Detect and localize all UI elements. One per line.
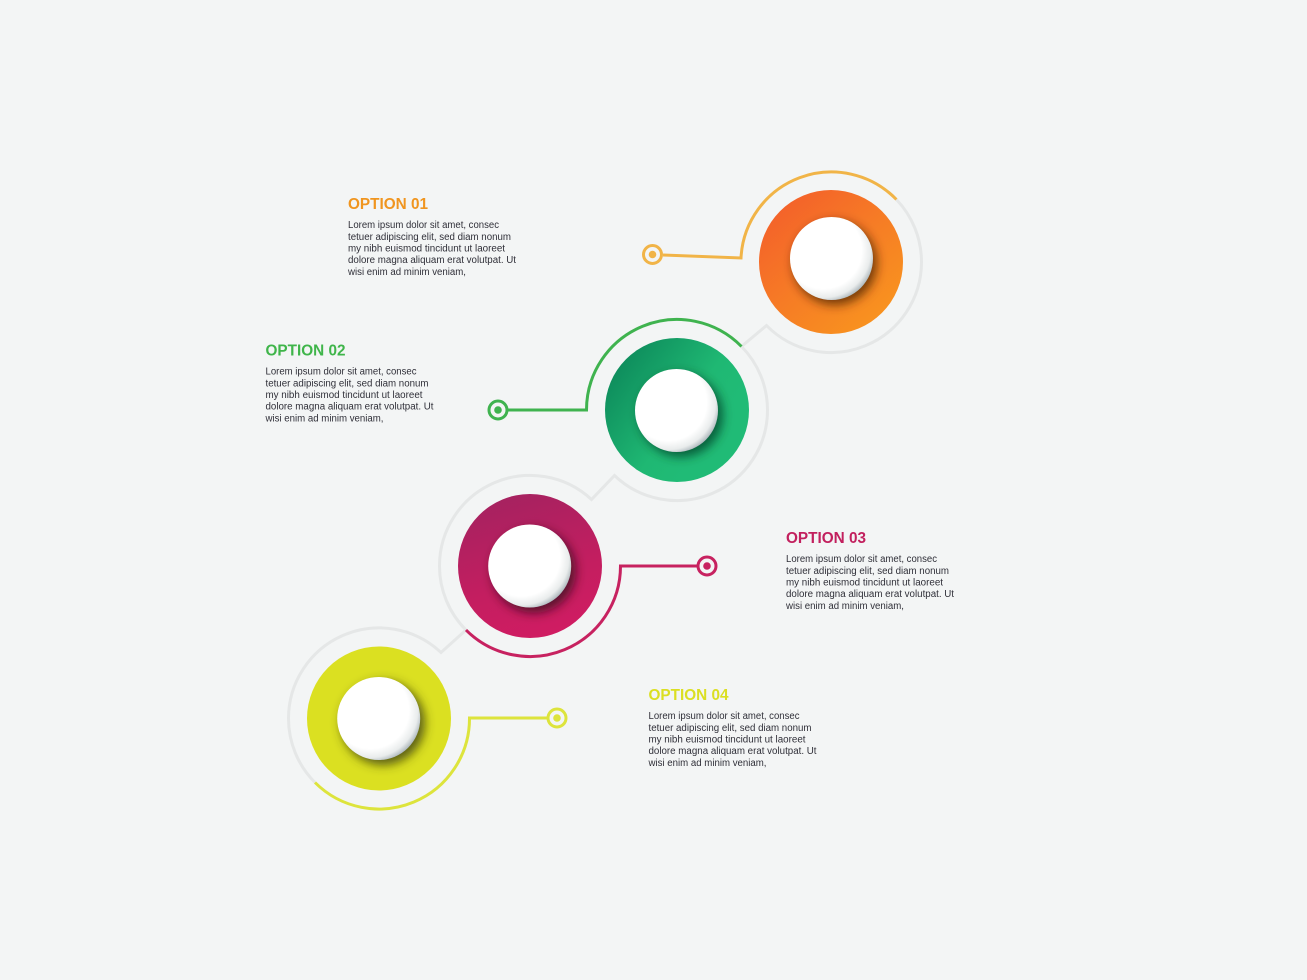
heading: option 03: OPTION 03 xyxy=(786,530,866,547)
magenta disc xyxy=(458,494,602,638)
body: option 03: my nibh euismod tincidunt ut laoreet xyxy=(786,578,943,588)
body: option 01 xyxy=(347,220,516,278)
step 3: magenta node xyxy=(458,494,716,657)
magenta disc white sphere xyxy=(488,524,571,608)
body: option 01: my nibh euismod tincidunt ut laoreet xyxy=(348,244,505,254)
body: option 04 xyxy=(648,711,817,769)
text block: option 02 xyxy=(265,342,434,424)
body: option 02: dolore magna aliquam erat volutpat. Ut xyxy=(266,402,434,412)
orange end marker xyxy=(644,246,662,264)
magenta arc and leader xyxy=(466,566,697,657)
text block: option 03 xyxy=(785,530,954,612)
text block: option 04 xyxy=(648,687,817,769)
body: option 03: wisi enim ad minim veniam, xyxy=(785,601,904,612)
body: option 03: dolore magna aliquam erat volutpat. Ut xyxy=(786,589,954,600)
heading: option 04: OPTION 04 xyxy=(648,687,729,704)
step 1: orange node xyxy=(644,172,903,334)
body: option 03: Lorem ipsum dolor sit amet, consec xyxy=(786,554,937,565)
body: option 04: Lorem ipsum dolor sit amet, consec xyxy=(648,711,800,722)
orange disc sphere shadow xyxy=(793,221,877,305)
body: option 01: dolore magna aliquam erat volutpat. Ut xyxy=(348,255,516,266)
body: option 02: wisi enim ad minim veniam, xyxy=(265,414,384,424)
lime end marker xyxy=(548,709,566,727)
lime disc xyxy=(307,646,451,790)
body: option 03 xyxy=(785,554,954,612)
body: option 04: dolore magna aliquam erat volutpat. Ut xyxy=(648,746,817,757)
heading: option 01: OPTION 01 xyxy=(348,196,428,213)
magenta disc sphere shadow xyxy=(492,529,576,613)
body: option 04: tetuer adipiscing elit, sed diam nonum xyxy=(648,723,812,734)
body: option 01: tetuer adipiscing elit, sed diam nonum xyxy=(348,232,511,243)
orange arc and leader xyxy=(663,172,896,258)
orange disc white sphere xyxy=(790,217,873,300)
green end marker xyxy=(489,401,507,419)
green arc and leader xyxy=(507,319,742,410)
step 4: lime node xyxy=(307,646,566,809)
body: option 02: Lorem ipsum dolor sit amet, consec xyxy=(266,366,416,378)
lime disc white sphere xyxy=(337,677,420,760)
green disc sphere shadow xyxy=(639,373,723,457)
green disc white sphere xyxy=(635,369,718,452)
lime disc sphere shadow xyxy=(341,681,425,765)
body: option 01: wisi enim ad minim veniam, xyxy=(347,267,466,278)
step 2: green node xyxy=(489,319,749,482)
body: option 04: wisi enim ad minim veniam, xyxy=(648,758,766,769)
lime arc and leader xyxy=(315,718,547,809)
grey connector line xyxy=(288,200,921,782)
body: option 02 xyxy=(265,366,434,424)
heading: option 02: OPTION 02 xyxy=(266,342,346,360)
body: option 03: tetuer adipiscing elit, sed diam nonum xyxy=(786,566,949,577)
body: option 02: my nibh euismod tincidunt ut laoreet xyxy=(266,390,423,401)
body: option 04: my nibh euismod tincidunt ut laoreet xyxy=(648,734,806,746)
magenta end marker xyxy=(698,557,716,575)
body: option 01: Lorem ipsum dolor sit amet, consec xyxy=(348,220,499,231)
orange disc xyxy=(759,190,903,334)
green disc xyxy=(605,338,749,482)
text block: option 01 xyxy=(347,196,516,278)
body: option 02: tetuer adipiscing elit, sed diam nonum xyxy=(266,378,428,390)
